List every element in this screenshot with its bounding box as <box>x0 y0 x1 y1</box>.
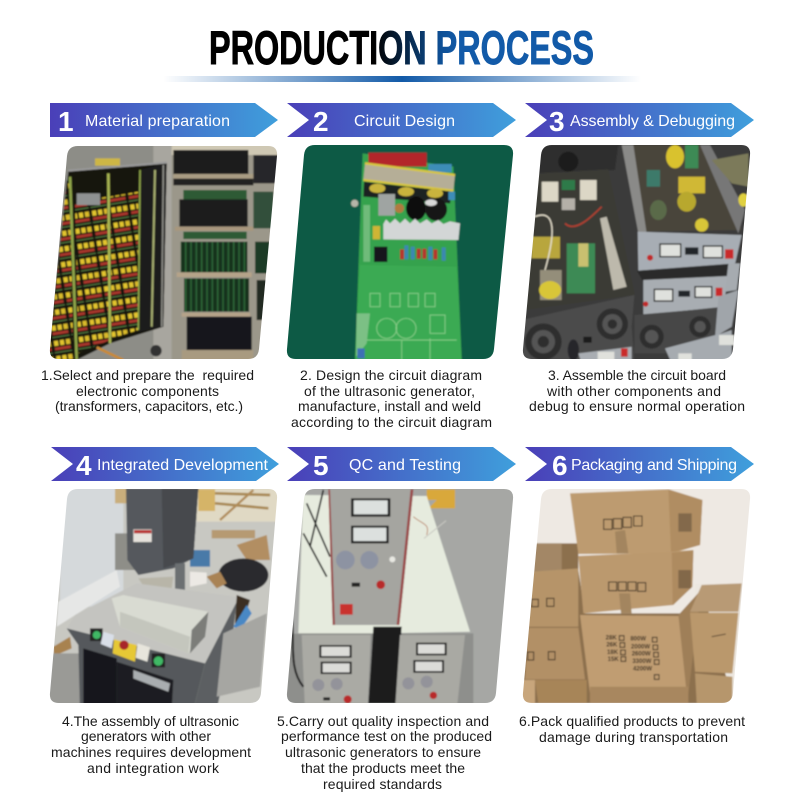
photo: packed cartons: 26K <box>606 643 618 649</box>
photo: packed cartons: 800W <box>630 637 646 643</box>
photo: assembly and debugging <box>522 145 750 359</box>
step number: 4 <box>76 450 92 481</box>
caption 2: according to the circuit diagram <box>291 414 492 430</box>
step label: Material preparation <box>85 113 230 130</box>
step 2 banner <box>287 103 516 137</box>
photo: packed cartons: 2600W <box>632 652 651 658</box>
photo: quality testing <box>286 489 514 703</box>
photo: packed cartons: 3300W <box>632 659 652 665</box>
caption 4 <box>51 713 251 776</box>
title underline <box>163 76 641 82</box>
step label: Circuit Design <box>354 113 455 130</box>
step 5 banner <box>287 447 516 481</box>
photo: packed cartons <box>522 489 750 703</box>
caption 5: 5.Carry out quality inspection and <box>277 713 489 729</box>
caption 1: 1.Select and prepare the required <box>41 367 254 383</box>
caption 2: of the ultrasonic generator, <box>304 383 475 399</box>
caption 3 <box>529 367 745 414</box>
caption 5 <box>277 713 492 792</box>
photo: packed cartons: 15K <box>608 657 619 663</box>
step number: 1 <box>58 106 74 137</box>
step 3 banner <box>525 103 754 137</box>
step label: Packaging and Shipping <box>571 457 737 474</box>
caption 1 <box>41 367 254 414</box>
caption 6: 6.Pack qualified products to prevent <box>519 713 745 729</box>
step number: 3 <box>549 106 565 137</box>
photo: circuit board <box>286 145 514 359</box>
step 4 banner <box>51 447 279 481</box>
step number: 2 <box>313 106 329 137</box>
photo: component racks <box>50 146 278 359</box>
caption 4: 4.The assembly of ultrasonic <box>62 713 239 729</box>
caption 2 <box>291 367 492 430</box>
photo: welding machine <box>50 489 278 703</box>
photo: packed cartons: 4200W <box>633 667 652 673</box>
caption 1: (transformers, capacitors, etc.) <box>55 398 243 414</box>
caption 5: ultrasonic generators to ensure <box>285 744 481 760</box>
caption 5: performance test on the produced <box>281 728 492 744</box>
step label: Integrated Development <box>97 457 269 474</box>
caption 6: damage during transportation <box>539 729 728 745</box>
step number: 5 <box>313 450 329 481</box>
title: PRODUCTION PROCESS <box>209 21 594 74</box>
caption 6 <box>519 713 745 745</box>
step label: Assembly & Debugging <box>570 113 735 130</box>
banner arrow <box>525 447 754 481</box>
caption 3: 3. Assemble the circuit board <box>548 367 726 383</box>
banner arrow <box>525 103 754 137</box>
caption 5: required standards <box>323 776 442 792</box>
banner arrow <box>287 447 516 481</box>
step 6 banner <box>525 447 754 481</box>
banner arrow <box>287 103 516 137</box>
photo: packed cartons: 18K <box>607 650 619 656</box>
photo: packed cartons: 28K <box>606 635 617 641</box>
step number: 6 <box>552 450 568 481</box>
caption 2: manufacture, install and weld <box>298 398 481 414</box>
caption 1: electronic components <box>76 383 219 399</box>
caption 4: and integration work <box>87 760 220 776</box>
banner arrow <box>51 447 279 481</box>
caption 5: that the products meet the <box>301 760 465 776</box>
step 1 banner <box>50 103 278 137</box>
photo: packed cartons: 2000W <box>631 644 650 650</box>
caption 4: machines requires development <box>51 744 251 760</box>
caption 3: debug to ensure normal operation <box>529 398 745 414</box>
step label: QC and Testing <box>349 457 461 474</box>
caption 2: 2. Design the circuit diagram <box>300 367 482 383</box>
caption 4: generators with other <box>81 728 211 744</box>
caption 3: with other components and <box>546 383 721 399</box>
banner arrow <box>50 103 278 137</box>
